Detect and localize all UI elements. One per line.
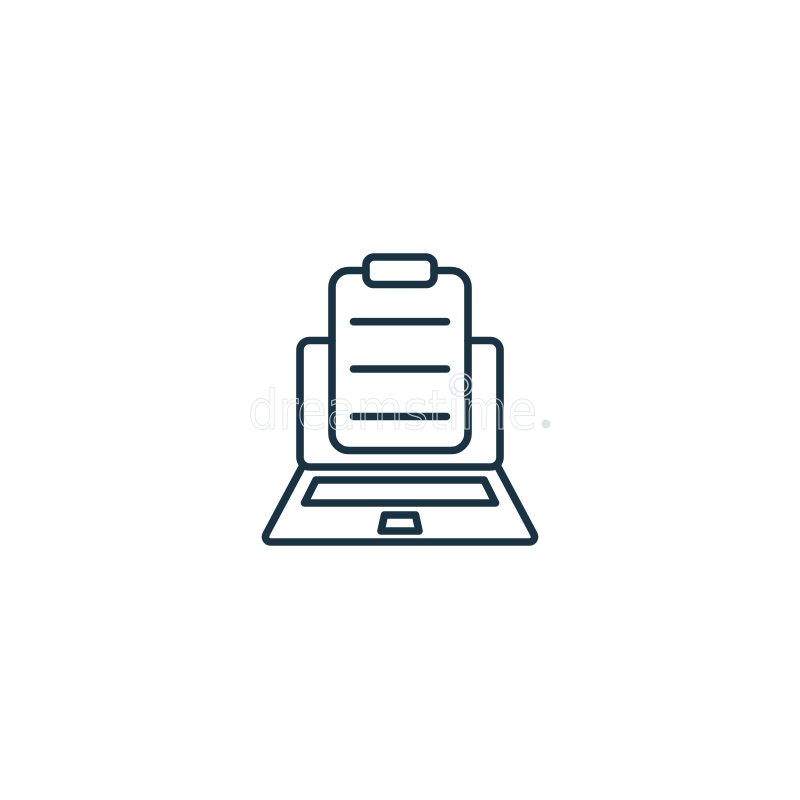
clipboard body bbox=[332, 270, 468, 450]
watermark wordmark: dreamstime bbox=[248, 379, 537, 442]
laptop screen bbox=[300, 340, 500, 467]
watermark logo bbox=[450, 374, 472, 396]
clipboard clip bbox=[366, 257, 434, 284]
icon: laptop with clipboard bbox=[266, 257, 534, 542]
keyboard bbox=[304, 480, 496, 503]
clipboard text lines bbox=[354, 322, 446, 416]
watermark bbox=[248, 374, 550, 442]
watermark dot bbox=[542, 420, 550, 428]
laptop base bbox=[266, 467, 534, 542]
trackpad bbox=[381, 515, 419, 531]
